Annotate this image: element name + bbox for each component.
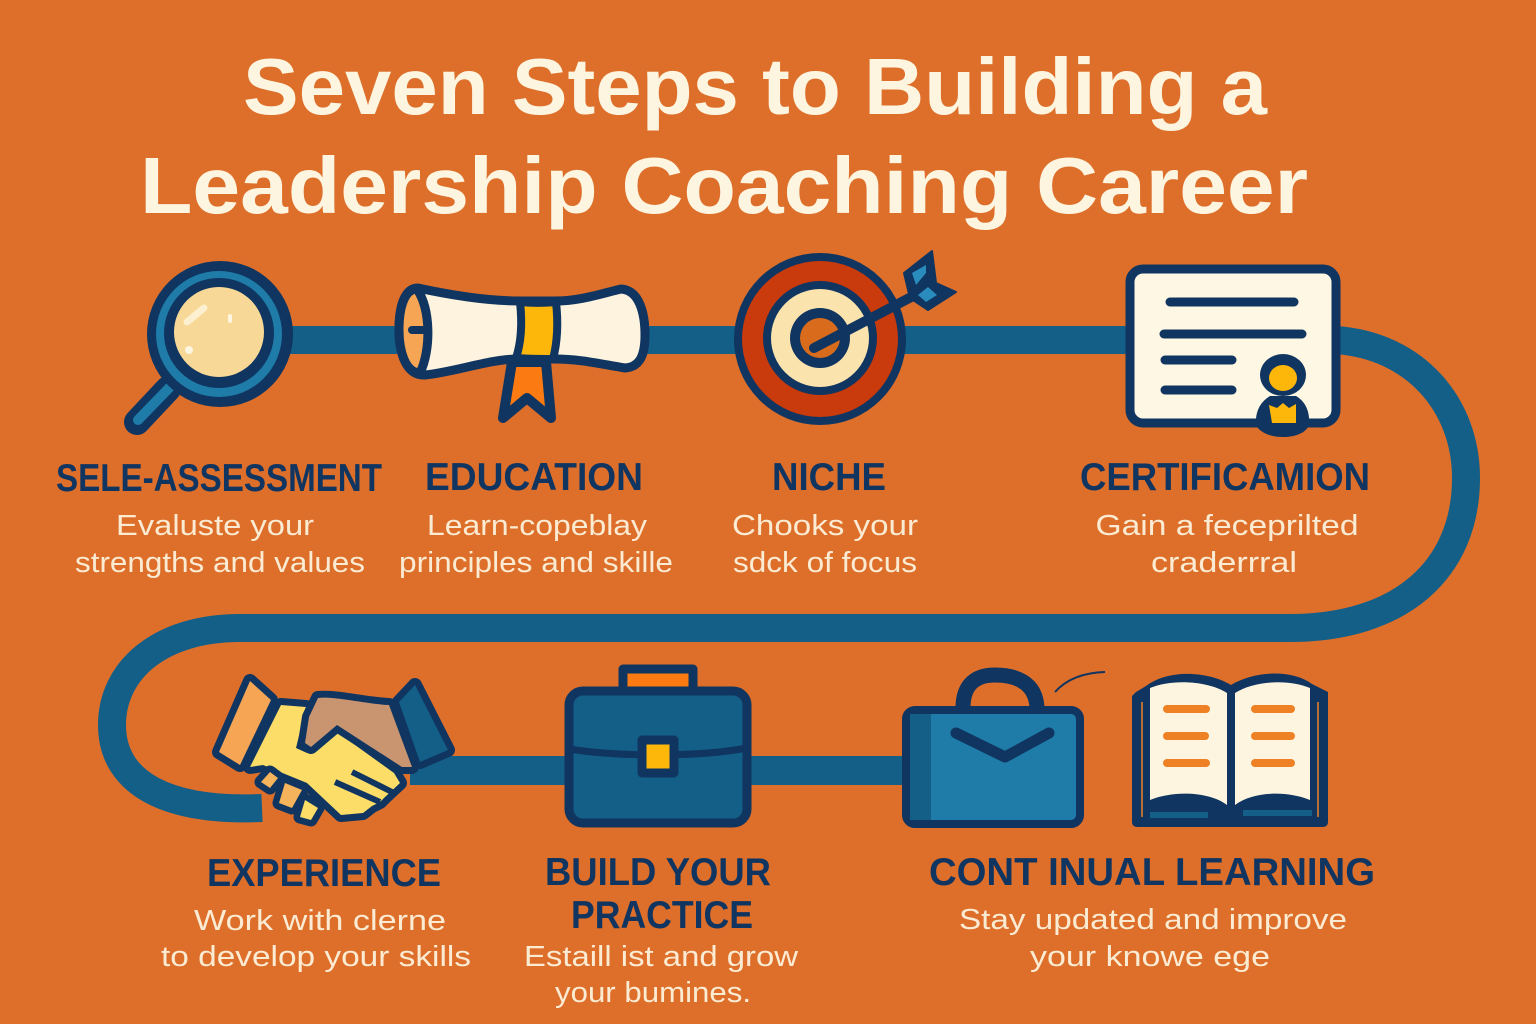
title: Seven Steps to Building a (243, 42, 1268, 131)
step 4: certification text: CERTIFICAMION (1080, 456, 1370, 499)
icon: briefcase (569, 669, 747, 823)
icon: target with arrow (734, 251, 956, 425)
step 3: niche text: sdck of focus (733, 547, 917, 579)
step 5: experience text: EXPERIENCE (207, 852, 441, 895)
step 1: self-assessment text (56, 457, 382, 579)
icon: blue case (906, 672, 1105, 824)
step 6: build your practice text: PRACTICE (571, 894, 753, 937)
step 3: niche text: NICHE (772, 456, 886, 499)
step 6: build your practice text: Estaill ist and grow (524, 941, 799, 973)
step 6: build your practice text: your bumines. (555, 977, 751, 1009)
step 7: continual learning text: Stay updated and improve (959, 904, 1347, 936)
winding path connector (112, 340, 1466, 808)
title: Leadership Coaching Career (140, 141, 1308, 230)
step 1: self-assessment text: strengths and values (75, 547, 365, 579)
step 4: certification text (1080, 456, 1370, 579)
step 5: experience text (161, 852, 471, 973)
step 3: niche text (732, 456, 918, 579)
icon: certificate (1130, 269, 1336, 437)
step 7: continual learning text: your knowe ege (1030, 941, 1270, 973)
step 2: education text: principles and skille (399, 547, 673, 579)
title (140, 42, 1308, 230)
icon: handshake (219, 681, 448, 820)
icon: magnifying glass (137, 261, 293, 422)
step 5: experience text: to develop your skills (161, 941, 471, 973)
step 7: continual learning text: CONT INUAL LEARNING (929, 851, 1375, 894)
step 1: self-assessment text: Evaluste your (116, 510, 314, 542)
icon: diploma scroll (399, 288, 645, 418)
step 4: certification text: craderrral (1151, 547, 1297, 579)
step 2: education text: EDUCATION (425, 456, 643, 499)
step 5: experience text: Work with clerne (194, 905, 446, 937)
step 1: self-assessment text: SELE-ASSESSMENT (56, 457, 382, 500)
step 7: continual learning text (929, 851, 1375, 973)
step 2: education text: Learn-copeblay (427, 510, 648, 542)
icon: open book (1132, 674, 1328, 827)
step 4: certification text: Gain a feceprilted (1096, 510, 1358, 542)
step 6: build your practice text: BUILD YOUR (545, 851, 771, 894)
step 3: niche text: Chooks your (732, 510, 918, 542)
step 2: education text (399, 456, 673, 579)
step 6: build your practice text (524, 851, 799, 1009)
